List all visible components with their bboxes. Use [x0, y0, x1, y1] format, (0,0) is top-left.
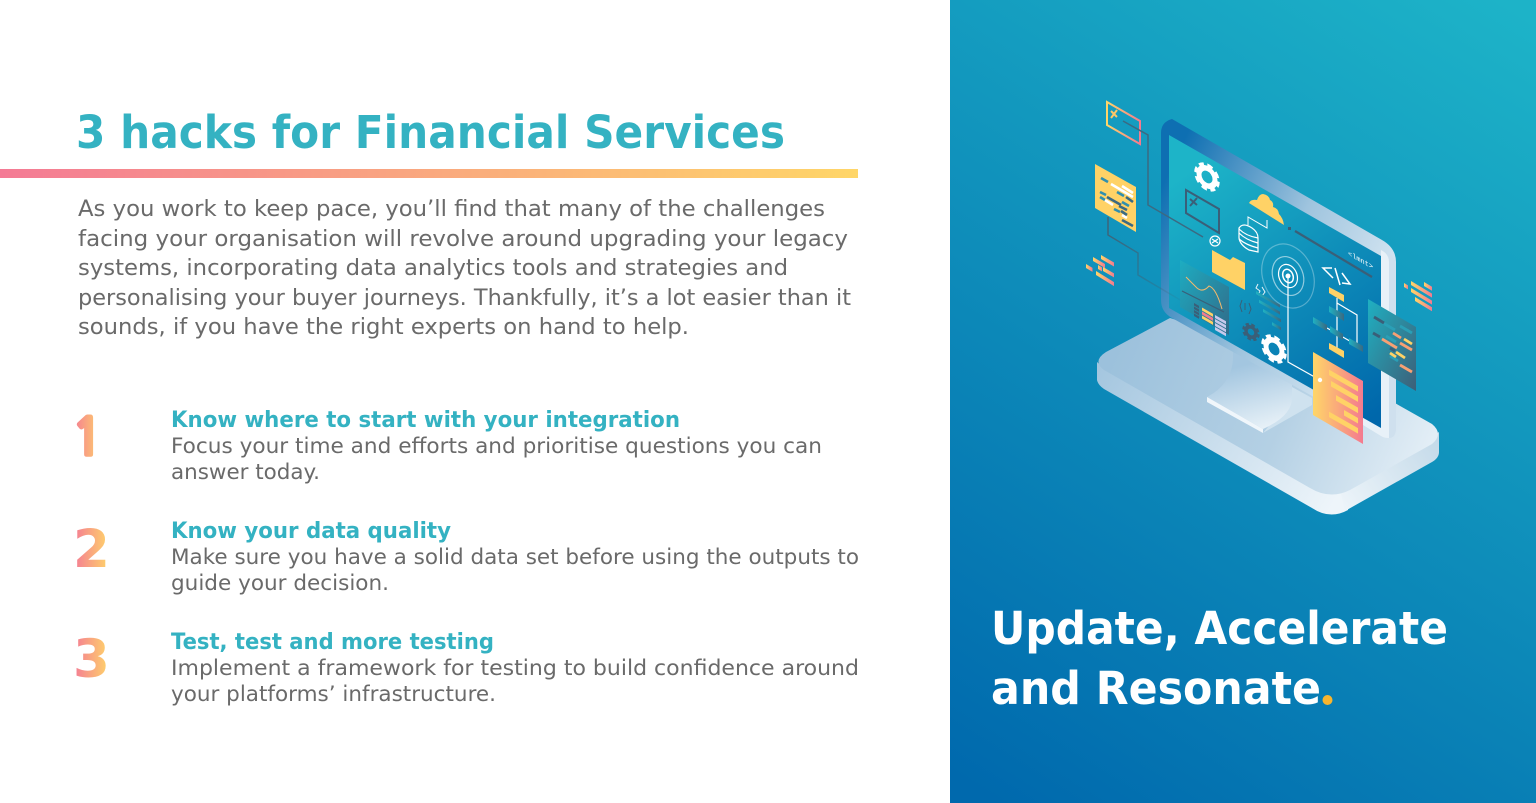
hack 1 heading: Know where to start with your integration	[171, 408, 680, 433]
monitor front right strip	[1363, 250, 1389, 438]
small brace glyphs	[1256, 284, 1265, 296]
number 3: 3	[73, 629, 110, 690]
icon: yellow folder	[1212, 250, 1245, 290]
intro paragraph: systems, incorporating data analytics tools and strategies and	[78, 255, 788, 281]
hack 3 body	[171, 656, 859, 706]
illustration: isometric computer	[1086, 102, 1439, 515]
hack 3 heading: Test, test and more testing	[171, 630, 494, 655]
tagline: and Resonate	[991, 662, 1321, 715]
orange code panel	[1313, 352, 1363, 444]
teal dashes centre	[1256, 291, 1281, 330]
monitor screen	[1169, 135, 1381, 428]
circled x icon	[1210, 236, 1220, 246]
tagline: Update, Accelerate	[991, 602, 1448, 655]
intro paragraph: facing your organisation will revolve around upgrading your legacy	[78, 226, 848, 252]
hack 2 body: Make sure you have a solid data set before using the outputs to	[171, 545, 859, 569]
monitor right edge	[1389, 254, 1396, 438]
icon: white gear bottom	[1263, 333, 1285, 365]
tagline	[991, 602, 1448, 715]
pink dashes left	[1086, 255, 1114, 286]
monitor bezel	[1161, 119, 1396, 438]
icon: radar rings	[1252, 236, 1324, 316]
monitor stand	[1207, 350, 1292, 433]
yellow period	[1322, 695, 1332, 705]
hack 1 body	[171, 434, 822, 484]
label: lmnt: <lmnt>	[1348, 250, 1373, 272]
connector to orange panel	[1288, 276, 1320, 380]
hack 2 body	[171, 545, 859, 595]
icon: dark gear	[1244, 322, 1258, 342]
connector line from window	[1123, 121, 1203, 237]
yellow code note	[1095, 164, 1136, 232]
hack 2	[73, 519, 859, 595]
hack 1 body: Focus your time and efforts and prioritise questions you can	[171, 434, 822, 458]
hack 2 heading: Know your data quality	[171, 519, 451, 544]
icon: database	[1239, 225, 1258, 252]
long dark line with label	[1288, 227, 1373, 277]
hack 3	[73, 629, 859, 706]
number 2: 2	[73, 519, 110, 580]
connector line from note	[1108, 217, 1182, 301]
intro paragraph	[78, 196, 851, 340]
small dark brace glyphs	[1240, 300, 1251, 314]
pink dashes right	[1404, 281, 1432, 311]
chart card	[1180, 260, 1229, 336]
intro paragraph: As you work to keep pace, you’ll find that many of the challenges	[78, 196, 825, 222]
icon: cloud to database link	[1248, 217, 1267, 228]
hack 3 body: Implement a framework for testing to build confidence around	[171, 656, 859, 680]
window outline top left	[1107, 102, 1140, 144]
panel: left white background	[0, 0, 950, 803]
hack 1 body: answer today.	[171, 460, 320, 484]
monitor base	[1097, 318, 1439, 515]
icon: yellow cloud	[1249, 194, 1284, 225]
icon: white gear top	[1196, 161, 1218, 193]
intro paragraph: sounds, if you have the right experts on hand to help.	[78, 314, 689, 340]
icon: dark window	[1186, 190, 1219, 233]
intro paragraph: personalising your buyer journeys. Thankfully, it’s a lot easier than it	[78, 285, 851, 311]
flow diagram	[1313, 287, 1363, 358]
code card right	[1368, 299, 1416, 391]
hack 3 body: your platforms’ infrastructure.	[171, 682, 496, 706]
icon: code brackets	[1323, 268, 1350, 285]
hack 1	[72, 408, 822, 484]
hack 2 body: guide your decision.	[171, 571, 389, 595]
panel: right blue gradient	[950, 0, 1536, 803]
gradient divider bar	[0, 169, 858, 178]
title: 3 hacks for Financial Services	[76, 106, 785, 159]
number 1: 1	[72, 412, 103, 463]
